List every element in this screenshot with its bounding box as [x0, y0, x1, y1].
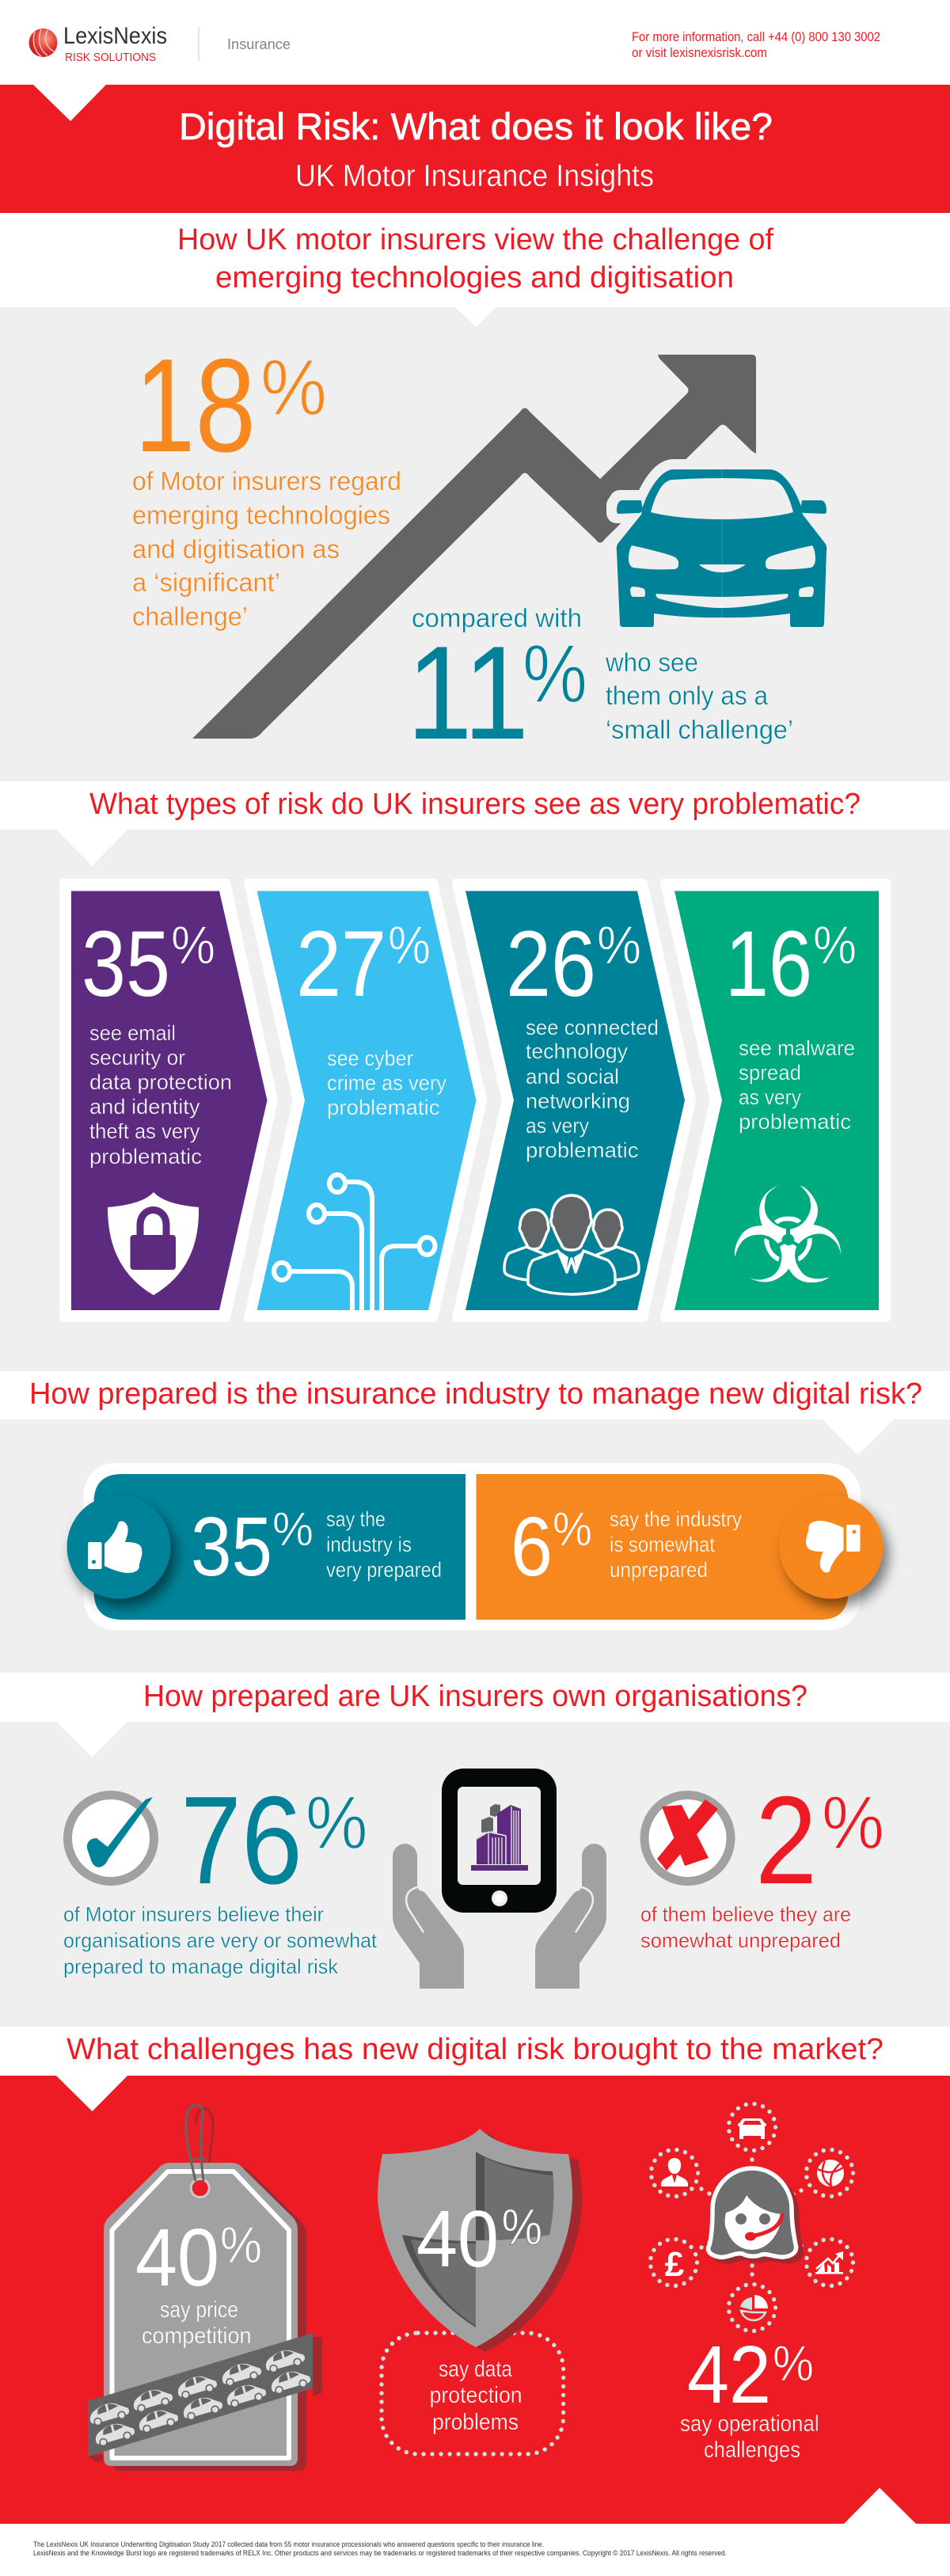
- bar: somewhat unprepared: 6: [511, 1500, 553, 1594]
- text: small challenge: them only as a: [606, 681, 769, 710]
- stat: 40% data protection: 40: [416, 2195, 499, 2284]
- icon: person: [661, 2158, 688, 2187]
- heading: market challenges: What challenges has new digital risk brought to the market?: [66, 2033, 884, 2066]
- divider line and sector label: Insurance: [227, 36, 291, 52]
- text: significant challenge: emerging technologies: [132, 500, 390, 530]
- text: prepared insurers: organisations are very or somewhat: [63, 1928, 378, 1952]
- icon: rising arrow: [192, 355, 756, 739]
- card: malware 16%: spread: [739, 1061, 801, 1085]
- text: significant challenge: of Motor insurers regard: [132, 466, 401, 496]
- icon: LexisNexis knowledge burst logo: [28, 28, 57, 57]
- brand subline: RISK SOLUTIONS: [65, 51, 156, 64]
- card: connected technology 26%: see connected: [526, 1016, 659, 1039]
- card: email security 35%: 35: [82, 912, 170, 1016]
- dotted box: data protection caption: [382, 2333, 564, 2454]
- panel: types of risk: [0, 830, 950, 1371]
- divider line and sector label: [198, 27, 291, 61]
- title: Digital Risk: What does it look like?: [179, 105, 773, 147]
- text: compared with: compared with: [412, 603, 582, 633]
- dotted box: data protection caption: problems: [432, 2410, 519, 2435]
- icon: pound sign: £: [665, 2245, 685, 2284]
- card: cyber crime 27%: problematic: [327, 1096, 440, 1119]
- bar: somewhat unprepared: %: [553, 1503, 592, 1556]
- icon: hands holding phone: [393, 1769, 606, 1989]
- footer notes: [33, 2540, 727, 2558]
- text: significant challenge: and digitisation as: [132, 534, 340, 564]
- card: malware 16%: see malware: [739, 1036, 855, 1060]
- bar: very prepared: %: [272, 1503, 314, 1556]
- card: cyber crime 27%: crime as very: [327, 1071, 446, 1095]
- contact details: [632, 29, 880, 60]
- card: cyber crime 27%: 27: [296, 912, 386, 1016]
- text: unprepared insurers: [640, 1902, 851, 1952]
- heading: industry preparedness: How prepared is the insurance industry to manage new digital risk?: [29, 1377, 922, 1411]
- text: small challenge: who see: [605, 648, 698, 677]
- brand name: LexisNexis: [63, 23, 167, 49]
- panel: own organisations: [0, 1722, 950, 2027]
- text: say price competition: [142, 2297, 252, 2349]
- bar: somewhat unprepared: [477, 1474, 849, 1620]
- card: connected technology 26%: and social: [526, 1065, 619, 1089]
- text: prepared insurers: [63, 1902, 378, 1978]
- card: malware 16%: problematic: [739, 1110, 851, 1134]
- subtitle: UK Motor Insurance Insights: [295, 159, 654, 193]
- bar: somewhat unprepared: is somewhat: [610, 1533, 715, 1556]
- contact details: For more information, call +44 (0) 800 130 3002: [632, 29, 880, 44]
- card: connected technology 26%: technology: [526, 1039, 628, 1063]
- card: malware 16%: as very: [739, 1085, 801, 1109]
- card: connected technology 26%: networking: [526, 1089, 630, 1113]
- heading: emerging technologies: emerging technologies and digitisation: [215, 261, 734, 294]
- icon: shield: [378, 2129, 582, 2352]
- card: connected technology 26%: [456, 883, 692, 1318]
- card: email security 35%: theft as very: [89, 1119, 200, 1143]
- card: connected technology 26%: 26: [506, 912, 596, 1016]
- footer notes: The LexisNexis UK Insurance Underwriting Digitisation Study 2017 collected data from 55 motor insurance processionals who answered questions specific to their insurance line.: [33, 2540, 544, 2549]
- panel: market challenges: [0, 2076, 950, 2524]
- icon: group of people: [504, 1195, 639, 1294]
- banner with cars: [88, 2333, 322, 2462]
- icon: office buildings: [471, 1804, 528, 1871]
- icon: check mark in circle: [68, 1795, 154, 1881]
- dotted box: data protection caption: protection: [430, 2383, 522, 2408]
- text: prepared insurers: of Motor insurers believe their: [63, 1902, 324, 1926]
- contact details: or visit lexisnexisrisk.com: [632, 45, 767, 60]
- heading: types of risk: What types of risk do UK insurers see as very problematic?: [89, 788, 861, 821]
- stat: 76%: %: [306, 1781, 367, 1865]
- card: email security 35%: data protection: [89, 1070, 232, 1094]
- title banner: [0, 85, 950, 213]
- icon: shield with padlock: [108, 1192, 199, 1295]
- icon: globe: [817, 2160, 844, 2187]
- heading: emerging technologies: How UK motor insurers view the challenge of: [177, 223, 773, 256]
- stat: 40% data protection: %: [502, 2198, 542, 2255]
- card: cyber crime 27%: [248, 883, 483, 1318]
- bar: somewhat unprepared: say the industry: [610, 1507, 742, 1531]
- bar: very prepared: say the: [326, 1507, 386, 1531]
- icon: growth chart: [815, 2251, 843, 2274]
- stat: 11%: %: [522, 629, 587, 720]
- text: small challenge: [605, 648, 793, 744]
- bar: somewhat unprepared: unprepared: [610, 1558, 708, 1582]
- heading: own organisations: How prepared are UK insurers own organisations?: [143, 1680, 808, 1713]
- icon: price tag: [88, 2105, 322, 2471]
- bar: very prepared: [93, 1474, 466, 1620]
- card: email security 35%: %: [171, 915, 215, 975]
- text: say price competition: competition: [142, 2323, 252, 2349]
- stat: 2%: [755, 1771, 884, 1910]
- card: connected technology 26%: as very: [526, 1114, 589, 1138]
- card: email security 35%: [63, 883, 274, 1318]
- stat: 2%: %: [822, 1781, 884, 1865]
- text: say price competition: say price: [160, 2297, 238, 2323]
- stat: 76%: 76: [180, 1771, 302, 1910]
- stat: 11%: 11: [407, 618, 529, 767]
- text: significant challenge: a ‘significant’: [132, 568, 280, 597]
- icon: pie chart: [740, 2295, 768, 2320]
- icon: cross in circle: [644, 1795, 731, 1881]
- stat: 42%: 42: [687, 2329, 771, 2420]
- dotted box: data protection caption: say data: [439, 2357, 513, 2382]
- card: cyber crime 27%: see cyber: [327, 1047, 413, 1070]
- icon: thumbs up: [66, 1495, 171, 1599]
- stat: 2%: 2: [755, 1771, 817, 1910]
- text: unprepared insurers: somewhat unprepared: [640, 1928, 841, 1952]
- heading: emerging technologies: [177, 223, 773, 294]
- footer notes: LexisNexis and the Knowledge Burst logo are registered trademarks of RELX Inc. Other products and services may be trademarks or registered trademarks of their respective companies. Copyright © 2017 LexisNexis. All rights reserved.: [33, 2549, 727, 2558]
- text: say operational challenges: say operational: [680, 2411, 819, 2437]
- text: significant challenge: challenge’: [132, 602, 248, 631]
- panel: industry preparedness: [0, 1419, 950, 1673]
- text: say operational challenges: challenges: [704, 2437, 800, 2463]
- text: unprepared insurers: of them believe they are: [640, 1902, 851, 1926]
- stat: 40% price competition: 40: [135, 2212, 219, 2303]
- text: small challenge: ‘small challenge’: [606, 715, 793, 744]
- panel: emerging technologies: [0, 307, 950, 781]
- text: significant challenge: [132, 466, 401, 631]
- card: malware 16%: 16: [725, 912, 812, 1016]
- card: malware 16%: %: [813, 915, 857, 975]
- text: prepared insurers: prepared to manage digital risk: [63, 1955, 339, 1978]
- bar: very prepared: industry is: [326, 1533, 412, 1556]
- icon: call centre operator with dotted satellites: [651, 2104, 853, 2331]
- card: connected technology 26%: problematic: [526, 1138, 638, 1162]
- icon: small car: [738, 2118, 766, 2139]
- stat: 40% price competition: %: [220, 2216, 262, 2274]
- card: cyber crime 27%: %: [388, 915, 431, 975]
- text: say operational challenges: [680, 2411, 819, 2463]
- card: email security 35%: problematic: [89, 1145, 202, 1168]
- stat: 18%: %: [260, 344, 327, 432]
- header: [28, 23, 880, 64]
- icon: car: [617, 469, 827, 627]
- stat: 18%: 18: [135, 331, 256, 480]
- icon: thumbs down: [779, 1495, 884, 1599]
- card: email security 35%: security or: [89, 1046, 185, 1070]
- card: connected technology 26%: %: [597, 915, 641, 975]
- bar: very prepared: 35: [191, 1500, 272, 1594]
- card: malware 16%: [664, 883, 887, 1318]
- icon: circuit lines: [274, 1175, 435, 1310]
- card: email security 35%: and identity: [89, 1095, 200, 1119]
- icon: biohazard symbol: ☣: [728, 1159, 847, 1314]
- card: email security 35%: see email: [89, 1021, 176, 1045]
- bar: very prepared: very prepared: [326, 1558, 442, 1582]
- stat: 42%: %: [773, 2336, 814, 2392]
